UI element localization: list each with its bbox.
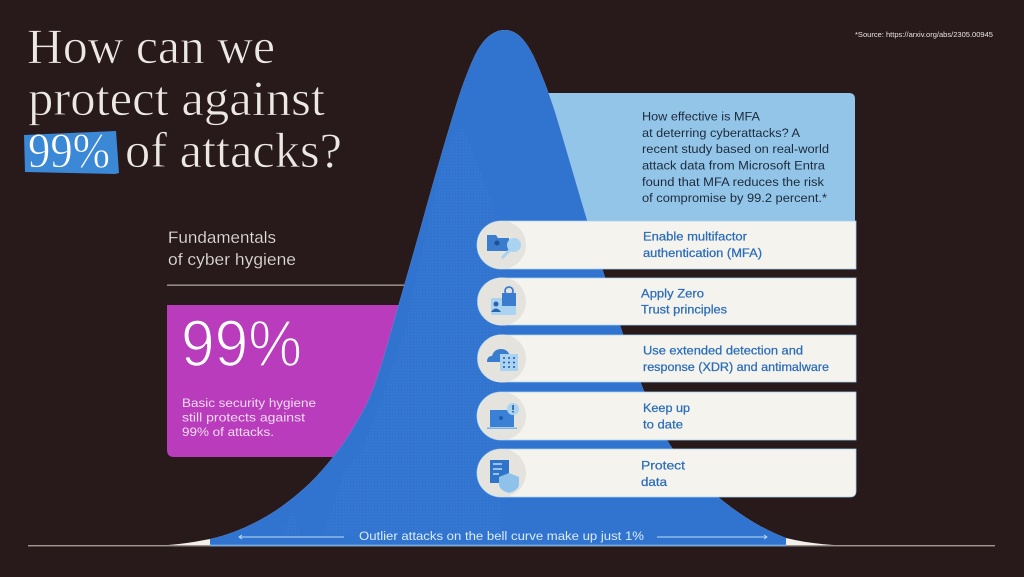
source note: *Source: https://arxiv.org/abs/2305.00945 <box>855 30 993 39</box>
row: MFA <box>477 221 856 269</box>
arrow: left <box>239 535 344 539</box>
heading: fundamentals of cyber hygiene: of cyber hygiene <box>168 251 296 269</box>
heading: fundamentals of cyber hygiene: Fundamentals <box>168 229 276 247</box>
dotted texture <box>282 125 500 535</box>
panel: 99 percent: still protects against <box>182 410 306 424</box>
bell curve <box>150 30 860 546</box>
row: Zero Trust: Apply Zero <box>641 286 704 300</box>
caption: outlier attacks <box>239 529 767 543</box>
highlight behind 99% <box>24 131 119 174</box>
caption: outlier attacks: Outlier attacks on the bell curve make up just 1% <box>359 529 644 543</box>
panel: MFA study: attack data from Microsoft Entra <box>642 158 825 172</box>
panel: MFA study: recent study based on real-world <box>642 142 829 156</box>
row: keep up to date <box>477 392 856 440</box>
panel: MFA study: How effective is MFA <box>642 110 761 124</box>
panel: MFA study: found that MFA reduces the risk <box>642 175 825 189</box>
row: protect data <box>477 449 856 497</box>
baseline <box>28 545 995 546</box>
icon: folder and key <box>487 235 521 258</box>
row: Zero Trust: Trust principles <box>641 302 727 316</box>
blue body of curve <box>210 30 786 545</box>
row: XDR: response (XDR) and antimalware <box>643 360 829 374</box>
panel: 99 percent <box>167 305 420 457</box>
row: MFA: Enable multifactor <box>643 230 747 244</box>
title: of attacks? <box>125 122 342 178</box>
row: MFA: authentication (MFA) <box>643 246 762 260</box>
arrow: right <box>657 535 767 539</box>
panel: 99 percent: Basic security hygiene <box>182 396 316 410</box>
curve tails <box>150 30 860 546</box>
heading: fundamentals of cyber hygiene <box>168 229 296 269</box>
title: protect against <box>28 70 325 126</box>
panel: MFA study <box>530 93 855 225</box>
icon: cloud and grid <box>487 349 518 371</box>
row: XDR: Use extended detection and <box>643 344 803 358</box>
icon: lock and person <box>491 287 516 315</box>
row: protect data: data <box>641 475 667 489</box>
title: 99% <box>28 122 110 178</box>
icon: server and shield <box>490 460 519 493</box>
panel: MFA study: at deterring cyberattacks? A <box>642 126 801 140</box>
panel: 99 percent: 99% of attacks. <box>182 425 274 439</box>
panel: 99 percent: 99% <box>181 306 302 380</box>
row: keep up to date: Keep up <box>643 401 690 415</box>
row: protect data: Protect <box>641 458 686 472</box>
row: Zero Trust <box>478 278 856 326</box>
icon: laptop <box>487 403 519 429</box>
title <box>24 18 342 178</box>
title: How can we <box>27 18 275 74</box>
row: keep up to date: to date <box>643 418 683 432</box>
row: XDR <box>478 334 856 382</box>
panel: MFA study: of compromise by 99.2 percent.* <box>642 191 827 205</box>
